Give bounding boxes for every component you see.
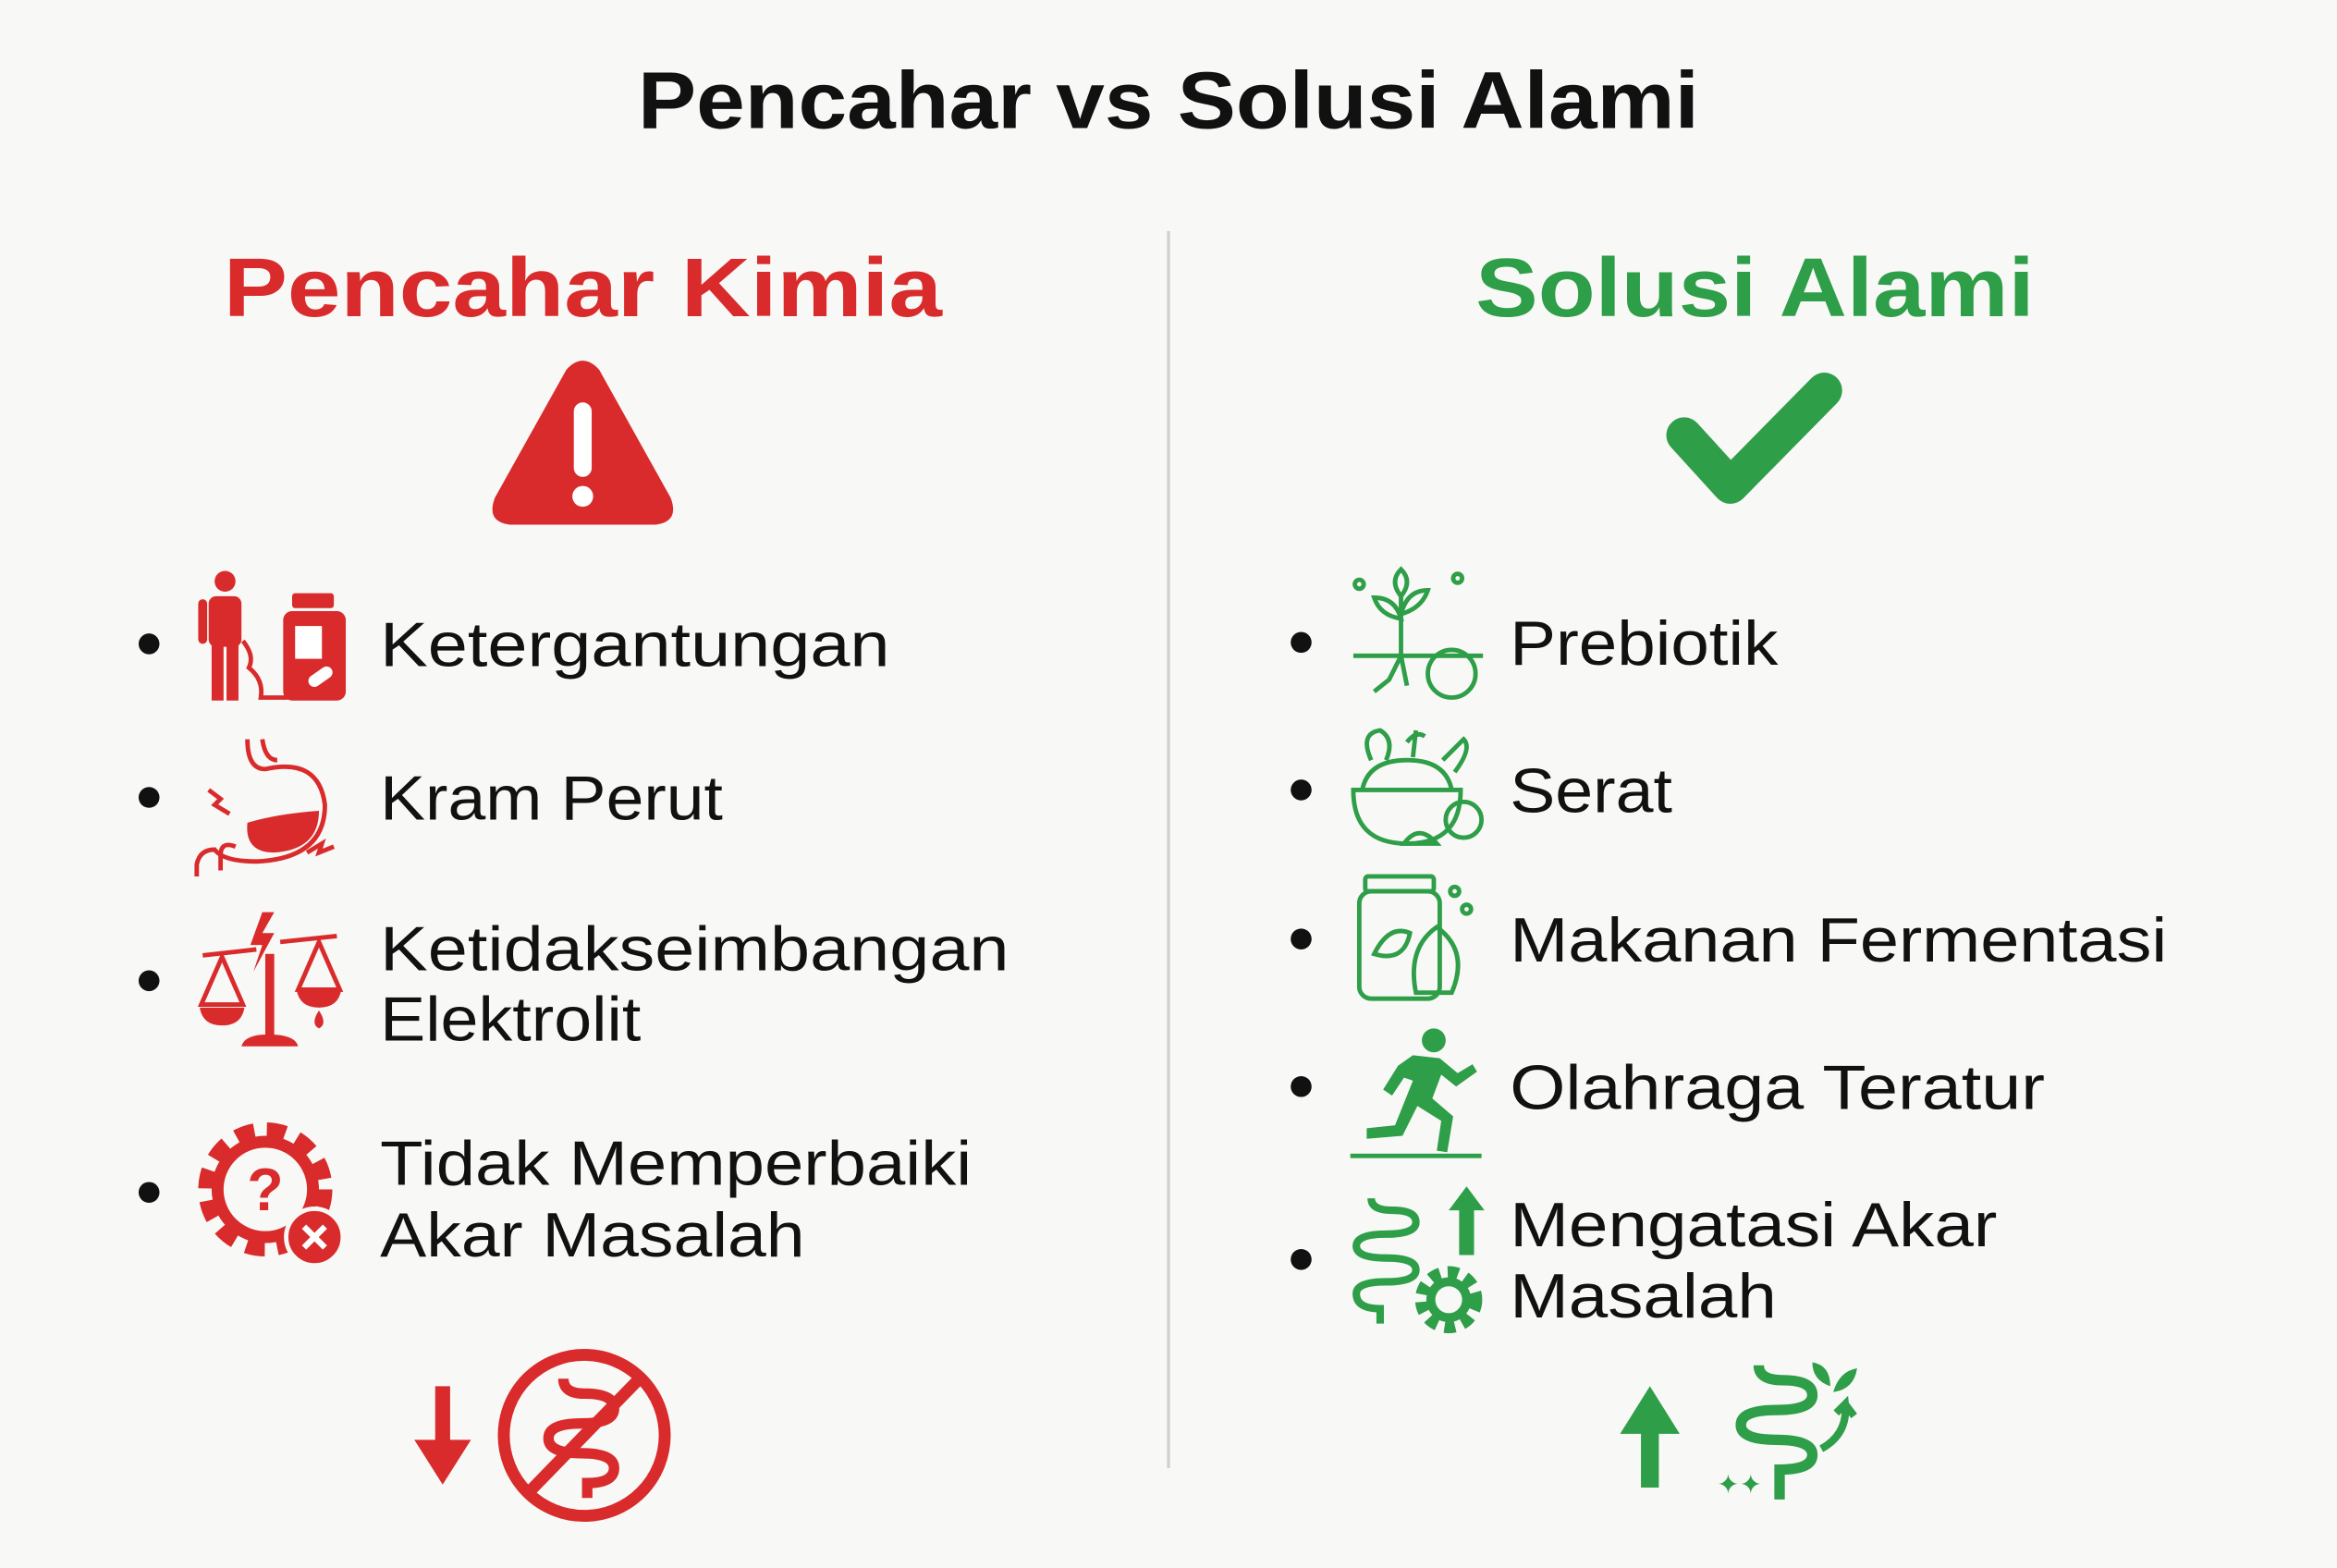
icon: healthy intestine: [1717, 1363, 1857, 1500]
panel: Pencahar Kimia: [139, 241, 1009, 1516]
item: Prebiotik: Prebiotik: [1510, 609, 1779, 679]
heading: Solusi Alami: Solusi Alami: [1475, 241, 2035, 335]
item: Serat: Serat: [1510, 757, 1672, 827]
icon: person chained to medicine: [198, 570, 346, 701]
item: Serat: [1291, 730, 1672, 843]
item: Tidak Memperbaiki Akar Masalah: Akar Masalah: [380, 1201, 805, 1270]
icon: intestine gear arrow: [1356, 1186, 1485, 1327]
item: Makanan Fermentasi: [1291, 876, 2167, 998]
icon: gear with question and x: ?: [247, 1157, 284, 1223]
item: Olahraga Teratur: Olahraga Teratur: [1510, 1053, 2045, 1122]
icon: stomach cramp: [197, 740, 334, 876]
icon: unbalanced scale: [200, 913, 341, 1047]
item: Mengatasi Akar Masalah: Mengatasi Akar: [1510, 1191, 1997, 1260]
icon: gear with question and x: [209, 1133, 343, 1266]
title: Pencahar vs Solusi Alami: [638, 56, 1699, 146]
icon: fiber bowl: [1353, 730, 1482, 843]
item: Tidak Memperbaiki Akar Masalah: Tidak Memperbaiki: [380, 1130, 972, 1199]
icon: warning triangle: [493, 361, 673, 524]
icon: down arrow: [414, 1386, 471, 1485]
item: Mengatasi Akar Masalah: [1291, 1186, 1997, 1331]
item: Kram Perut: [139, 740, 723, 876]
item: Kram Perut: Kram Perut: [380, 765, 723, 834]
icon: prohibited intestine: [504, 1354, 665, 1516]
item: Mengatasi Akar Masalah: Masalah: [1510, 1262, 1777, 1331]
item: Olahraga Teratur: [1291, 1028, 2045, 1158]
item: Ketergantungan: Ketergantungan: [380, 611, 890, 680]
icon: healthy intestine: ✦✦: [1717, 1470, 1762, 1500]
item: Ketidakseimbangan Elektrolit: Ketidakseimbangan: [380, 915, 1009, 985]
icon: up arrow: [1621, 1386, 1680, 1488]
item: Ketidakseimbangan Elektrolit: [139, 913, 1009, 1054]
panel: Solusi Alami: [1291, 241, 2167, 1500]
item: Ketidakseimbangan Elektrolit: Elektrolit: [380, 985, 641, 1054]
icon: fermented jar: [1359, 876, 1471, 998]
heading: Pencahar Kimia: Pencahar Kimia: [224, 241, 943, 335]
icon: runner: [1351, 1028, 1482, 1158]
item: Prebiotik: [1291, 570, 1779, 697]
icon: plant and microbes: [1353, 570, 1483, 697]
icon: check mark: [1684, 390, 1824, 486]
item: Ketergantungan: [139, 570, 890, 701]
item: Tidak Memperbaiki Akar Masalah: [139, 1130, 972, 1270]
item: Makanan Fermentasi: Makanan Fermentasi: [1510, 906, 2167, 975]
